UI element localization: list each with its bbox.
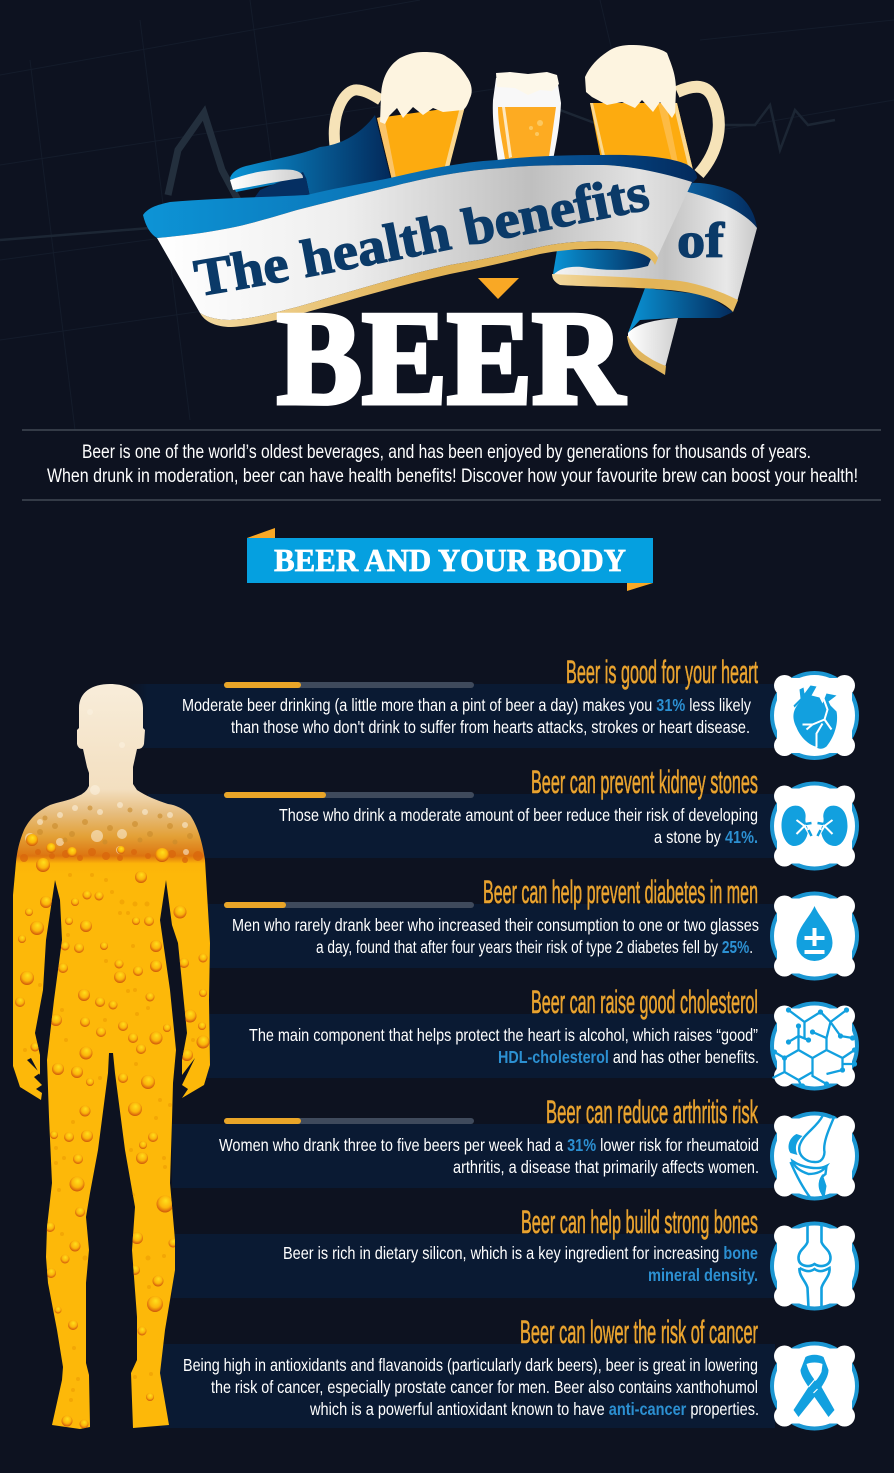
icon: right mug <box>585 45 719 174</box>
row panels <box>128 684 775 1428</box>
title illustration: beer mugs <box>334 45 719 180</box>
icon: middle glass <box>493 72 561 162</box>
row 5: arthritis: Women who drank three to five beers per week had a 31% lower risk for rheumatoid <box>219 1135 759 1155</box>
progress bar: 31% <box>224 1118 474 1124</box>
row 1: heart <box>182 654 857 758</box>
row 7: cancer: the risk of cancer, especially prostate cancer for men. Beer also contains xanthohumol <box>211 1377 758 1397</box>
row 7: cancer: Being high in antioxidants and flavanoids (particularly dark beers), beer is great in lowering <box>183 1355 758 1375</box>
ribbon: back left fold <box>230 115 391 204</box>
title ribbon: The health benefits <box>192 182 650 296</box>
title word: of: of <box>677 212 726 268</box>
progress bar: 41% <box>224 792 474 798</box>
ribbon: lower tail <box>627 288 733 375</box>
intro text block <box>22 430 881 500</box>
icon: bone joint <box>772 1224 857 1308</box>
section heading banner <box>247 528 653 591</box>
row 2: kidney: Those who drink a moderate amount of beer reduce their risk of developing <box>279 805 758 825</box>
row 4: cholesterol <box>249 984 857 1089</box>
background grid and heartbeat line <box>0 0 894 430</box>
small bubbles <box>23 873 195 1402</box>
row 2: kidney <box>224 764 857 868</box>
title ribbon <box>143 115 757 375</box>
title text on ribbon <box>198 207 660 296</box>
icon: knee joint <box>772 1114 857 1198</box>
row 5: arthritis: arthritis, a disease that primarily affects women. <box>453 1157 759 1177</box>
icon: blood drop <box>772 894 857 978</box>
row 1: heart: Moderate beer drinking (a little more than a pint of beer a day) makes you 31% less likely <box>182 695 751 715</box>
row 6: bones <box>283 1204 857 1308</box>
row 5: arthritis <box>219 1094 857 1198</box>
icon: molecule network <box>772 1004 857 1089</box>
progress bar: 25% <box>224 902 474 908</box>
icon: heart <box>772 673 857 758</box>
row 1: heart: than those who don't drink to suffer from hearts attacks, strokes or heart disease. <box>231 717 750 737</box>
foam texture <box>25 709 189 856</box>
row 7: cancer <box>183 1314 857 1428</box>
progress bar: 31% <box>224 682 474 688</box>
beer bubbles <box>15 834 210 1428</box>
row 6: bones: mineral density. <box>648 1265 758 1285</box>
row 3: diabetes: Men who rarely drank beer who increased their consumption to one or two glasses <box>232 915 759 935</box>
row 2: kidney: a stone by 41%. <box>654 827 758 847</box>
row 3: diabetes <box>224 874 857 978</box>
ribbon: right section with "of" <box>552 183 757 312</box>
row 4: cholesterol: HDL-cholesterol and has other benefits. <box>498 1047 759 1067</box>
orange triangle pointer <box>478 278 519 299</box>
icon: awareness ribbon <box>772 1344 857 1428</box>
row 7: cancer: which is a powerful antioxidant known to have anti-cancer properties. <box>309 1399 759 1419</box>
section heading banner: BEER AND YOUR BODY <box>274 542 626 578</box>
row 4: cholesterol: The main component that helps protect the heart is alcohol, which raises “good” <box>249 1025 758 1045</box>
row 6: bones: Beer is rich in dietary silicon, which is a key ingredient for increasing bone <box>283 1243 758 1263</box>
row 3: diabetes: a day, found that after four years their risk of type 2 diabetes fell by 25%. <box>316 937 753 957</box>
icon: left mug <box>334 52 472 180</box>
title word: BEER: BEER <box>277 284 625 432</box>
ribbon: front band <box>143 155 697 327</box>
icon: kidneys <box>772 784 857 868</box>
human body silhouette filled with beer <box>13 684 210 1429</box>
